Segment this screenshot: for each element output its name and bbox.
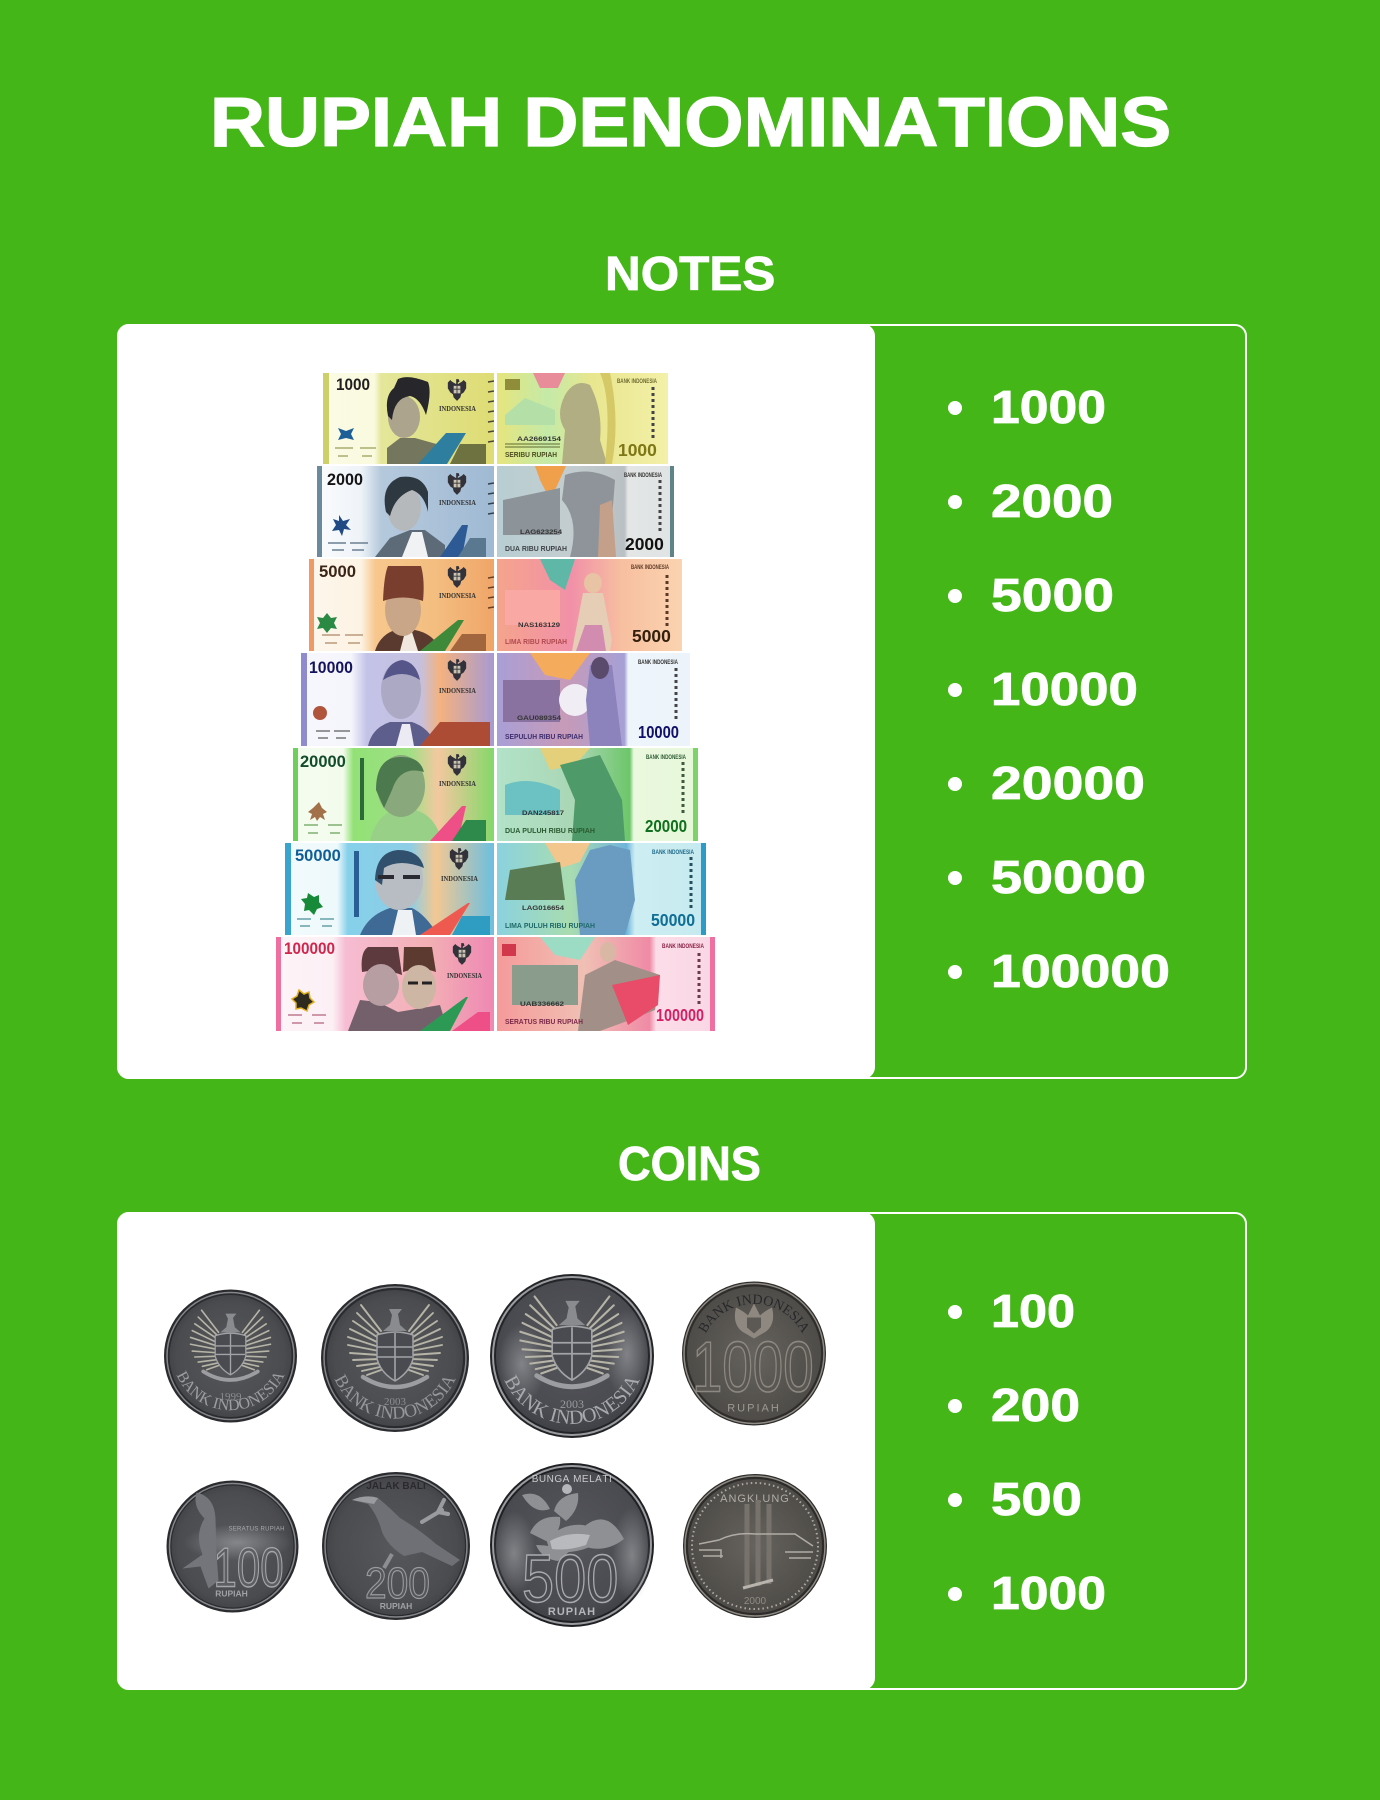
note: 100000: SERATUS RIBU RUPIAH xyxy=(505,1019,583,1026)
note: 10000: 10000 xyxy=(638,723,679,742)
note: 10000: BANK INDONESIA xyxy=(638,660,679,666)
note: 20000: BANK INDONESIA xyxy=(646,755,687,761)
list: coin denominations: 500 xyxy=(991,1473,1082,1525)
note: 20000 xyxy=(293,748,698,841)
note: 2000: BANK INDONESIA xyxy=(624,473,662,479)
coin: 1000 obverse: RUPIAH xyxy=(727,1402,781,1414)
note: 100000: 100000 xyxy=(656,1006,704,1025)
list: note denominations: 50000 xyxy=(991,852,1146,903)
note: 10000 xyxy=(301,653,690,746)
coin: 500 obverse: 2003 xyxy=(560,1397,584,1411)
coin: 500 obverse xyxy=(490,1274,654,1438)
note: 1000: 1000 xyxy=(618,440,657,460)
note: 5000: INDONESIA xyxy=(439,591,477,600)
coin: 1000 reverse: 2000 xyxy=(744,1596,767,1607)
note: 20000: DUA PULUH RIBU RUPIAH xyxy=(505,828,595,835)
note: 2000: 2000 xyxy=(625,534,664,554)
note: 10000: GAU089354 xyxy=(517,716,562,722)
coin: 500 reverse: RUPIAH xyxy=(548,1606,596,1618)
coin: 100 obverse xyxy=(164,1290,297,1422)
list: note denominations xyxy=(948,383,1170,997)
coin: 500 reverse: 500 xyxy=(522,1542,618,1617)
list: note denominations: 1000 xyxy=(991,383,1106,433)
note: 1000 xyxy=(323,373,668,464)
note: 100000: 100000 xyxy=(284,939,335,958)
list: note denominations: 5000 xyxy=(991,569,1114,621)
note: 5000: 5000 xyxy=(632,626,671,646)
note: 50000: LAG016654 xyxy=(522,906,565,912)
coin: 200 reverse: JALAK BALI xyxy=(366,1481,426,1492)
note: 100000: BANK INDONESIA xyxy=(662,944,705,950)
note: 5000: 5000 xyxy=(319,562,356,581)
coins grid xyxy=(164,1274,827,1627)
panel: notes xyxy=(117,324,1246,1079)
coin: 200 reverse xyxy=(322,1472,470,1620)
coin: 1000 reverse xyxy=(683,1474,827,1618)
coin: 100 obverse: 1999 xyxy=(220,1391,242,1403)
coin: 100 reverse: 100 xyxy=(214,1537,284,1599)
panel: coins xyxy=(117,1212,1247,1690)
note: 2000: INDONESIA xyxy=(439,498,477,507)
banknotes stack xyxy=(276,373,715,1031)
note: 100000: UAB336662 xyxy=(520,1002,565,1008)
note: 5000: NAS163129 xyxy=(518,623,561,629)
note: 1000: INDONESIA xyxy=(439,404,477,413)
note: 100000 xyxy=(276,937,715,1031)
coin: 500 reverse: BUNGA MELATI xyxy=(532,1474,612,1485)
note: 10000: SEPULUH RIBU RUPIAH xyxy=(505,734,583,741)
note: 2000 xyxy=(317,466,674,557)
title: RUPIAH DENOMINATIONS xyxy=(210,83,1171,161)
note: 5000 xyxy=(309,559,682,651)
note: 1000: 1000 xyxy=(336,375,370,394)
note: 50000: 50000 xyxy=(295,846,341,865)
list: note denominations: 100000 xyxy=(991,946,1170,997)
coin: 1000 obverse: 1000 xyxy=(692,1329,814,1407)
coin: 1000 reverse: ANGKLUNG xyxy=(720,1493,790,1505)
coin: 100 reverse xyxy=(166,1480,298,1612)
note: 2000: DUA RIBU RUPIAH xyxy=(505,546,567,553)
coin: 200 obverse: BANK INDONESIA xyxy=(334,1374,456,1419)
note: 1000: SERIBU RUPIAH xyxy=(505,452,557,459)
note: 50000: 50000 xyxy=(651,910,695,930)
note: 5000: LIMA RIBU RUPIAH xyxy=(505,639,567,646)
coin: 200 reverse: RUPIAH xyxy=(380,1601,412,1611)
note: 10000: INDONESIA xyxy=(439,686,477,695)
coin: 100 obverse: BANK INDONESIA xyxy=(176,1370,285,1410)
list: note denominations: 20000 xyxy=(991,757,1145,809)
coin: 200 obverse: 2003 xyxy=(384,1396,406,1408)
coin: 1000 obverse: BANK INDONESIA xyxy=(698,1294,808,1334)
coin: 200 reverse: 200 xyxy=(365,1558,430,1608)
coin: 500 reverse xyxy=(490,1463,654,1627)
note: 50000: LIMA PULUH RIBU RUPIAH xyxy=(505,923,595,930)
list: note denominations: 2000 xyxy=(991,475,1113,527)
list: coin denominations: 200 xyxy=(991,1379,1080,1431)
note: 100000: INDONESIA xyxy=(447,971,482,980)
note: 20000: DAN245817 xyxy=(522,811,565,817)
note: 10000: 10000 xyxy=(309,659,353,677)
heading: coins: COINS xyxy=(618,1137,761,1190)
note: 20000: 20000 xyxy=(645,816,687,836)
coin: 500 obverse: BANK INDONESIA xyxy=(504,1374,640,1424)
note: 20000: 20000 xyxy=(300,752,346,771)
note: 50000: BANK INDONESIA xyxy=(652,850,695,856)
coin: 1000 obverse xyxy=(682,1282,826,1426)
heading: notes: NOTES xyxy=(605,248,775,301)
note: 2000: 2000 xyxy=(327,470,363,489)
list: coin denominations xyxy=(948,1286,1106,1619)
note: 50000 xyxy=(285,843,706,935)
coin: 100 reverse: RUPIAH xyxy=(215,1588,248,1598)
coin: 200 obverse xyxy=(321,1284,469,1432)
note: 2000: LAG623254 xyxy=(520,530,563,536)
note: 20000: INDONESIA xyxy=(439,779,477,788)
note: 5000: BANK INDONESIA xyxy=(631,565,669,571)
coin: 100 reverse: SERATUS RUPIAH xyxy=(228,1526,284,1532)
note: 50000: INDONESIA xyxy=(441,874,479,883)
list: coin denominations: 100 xyxy=(991,1286,1075,1337)
list: coin denominations: 1000 xyxy=(991,1569,1106,1619)
list: note denominations: 10000 xyxy=(991,664,1138,715)
note: 1000: AA2669154 xyxy=(517,437,562,443)
note: 1000: BANK INDONESIA xyxy=(617,379,658,385)
